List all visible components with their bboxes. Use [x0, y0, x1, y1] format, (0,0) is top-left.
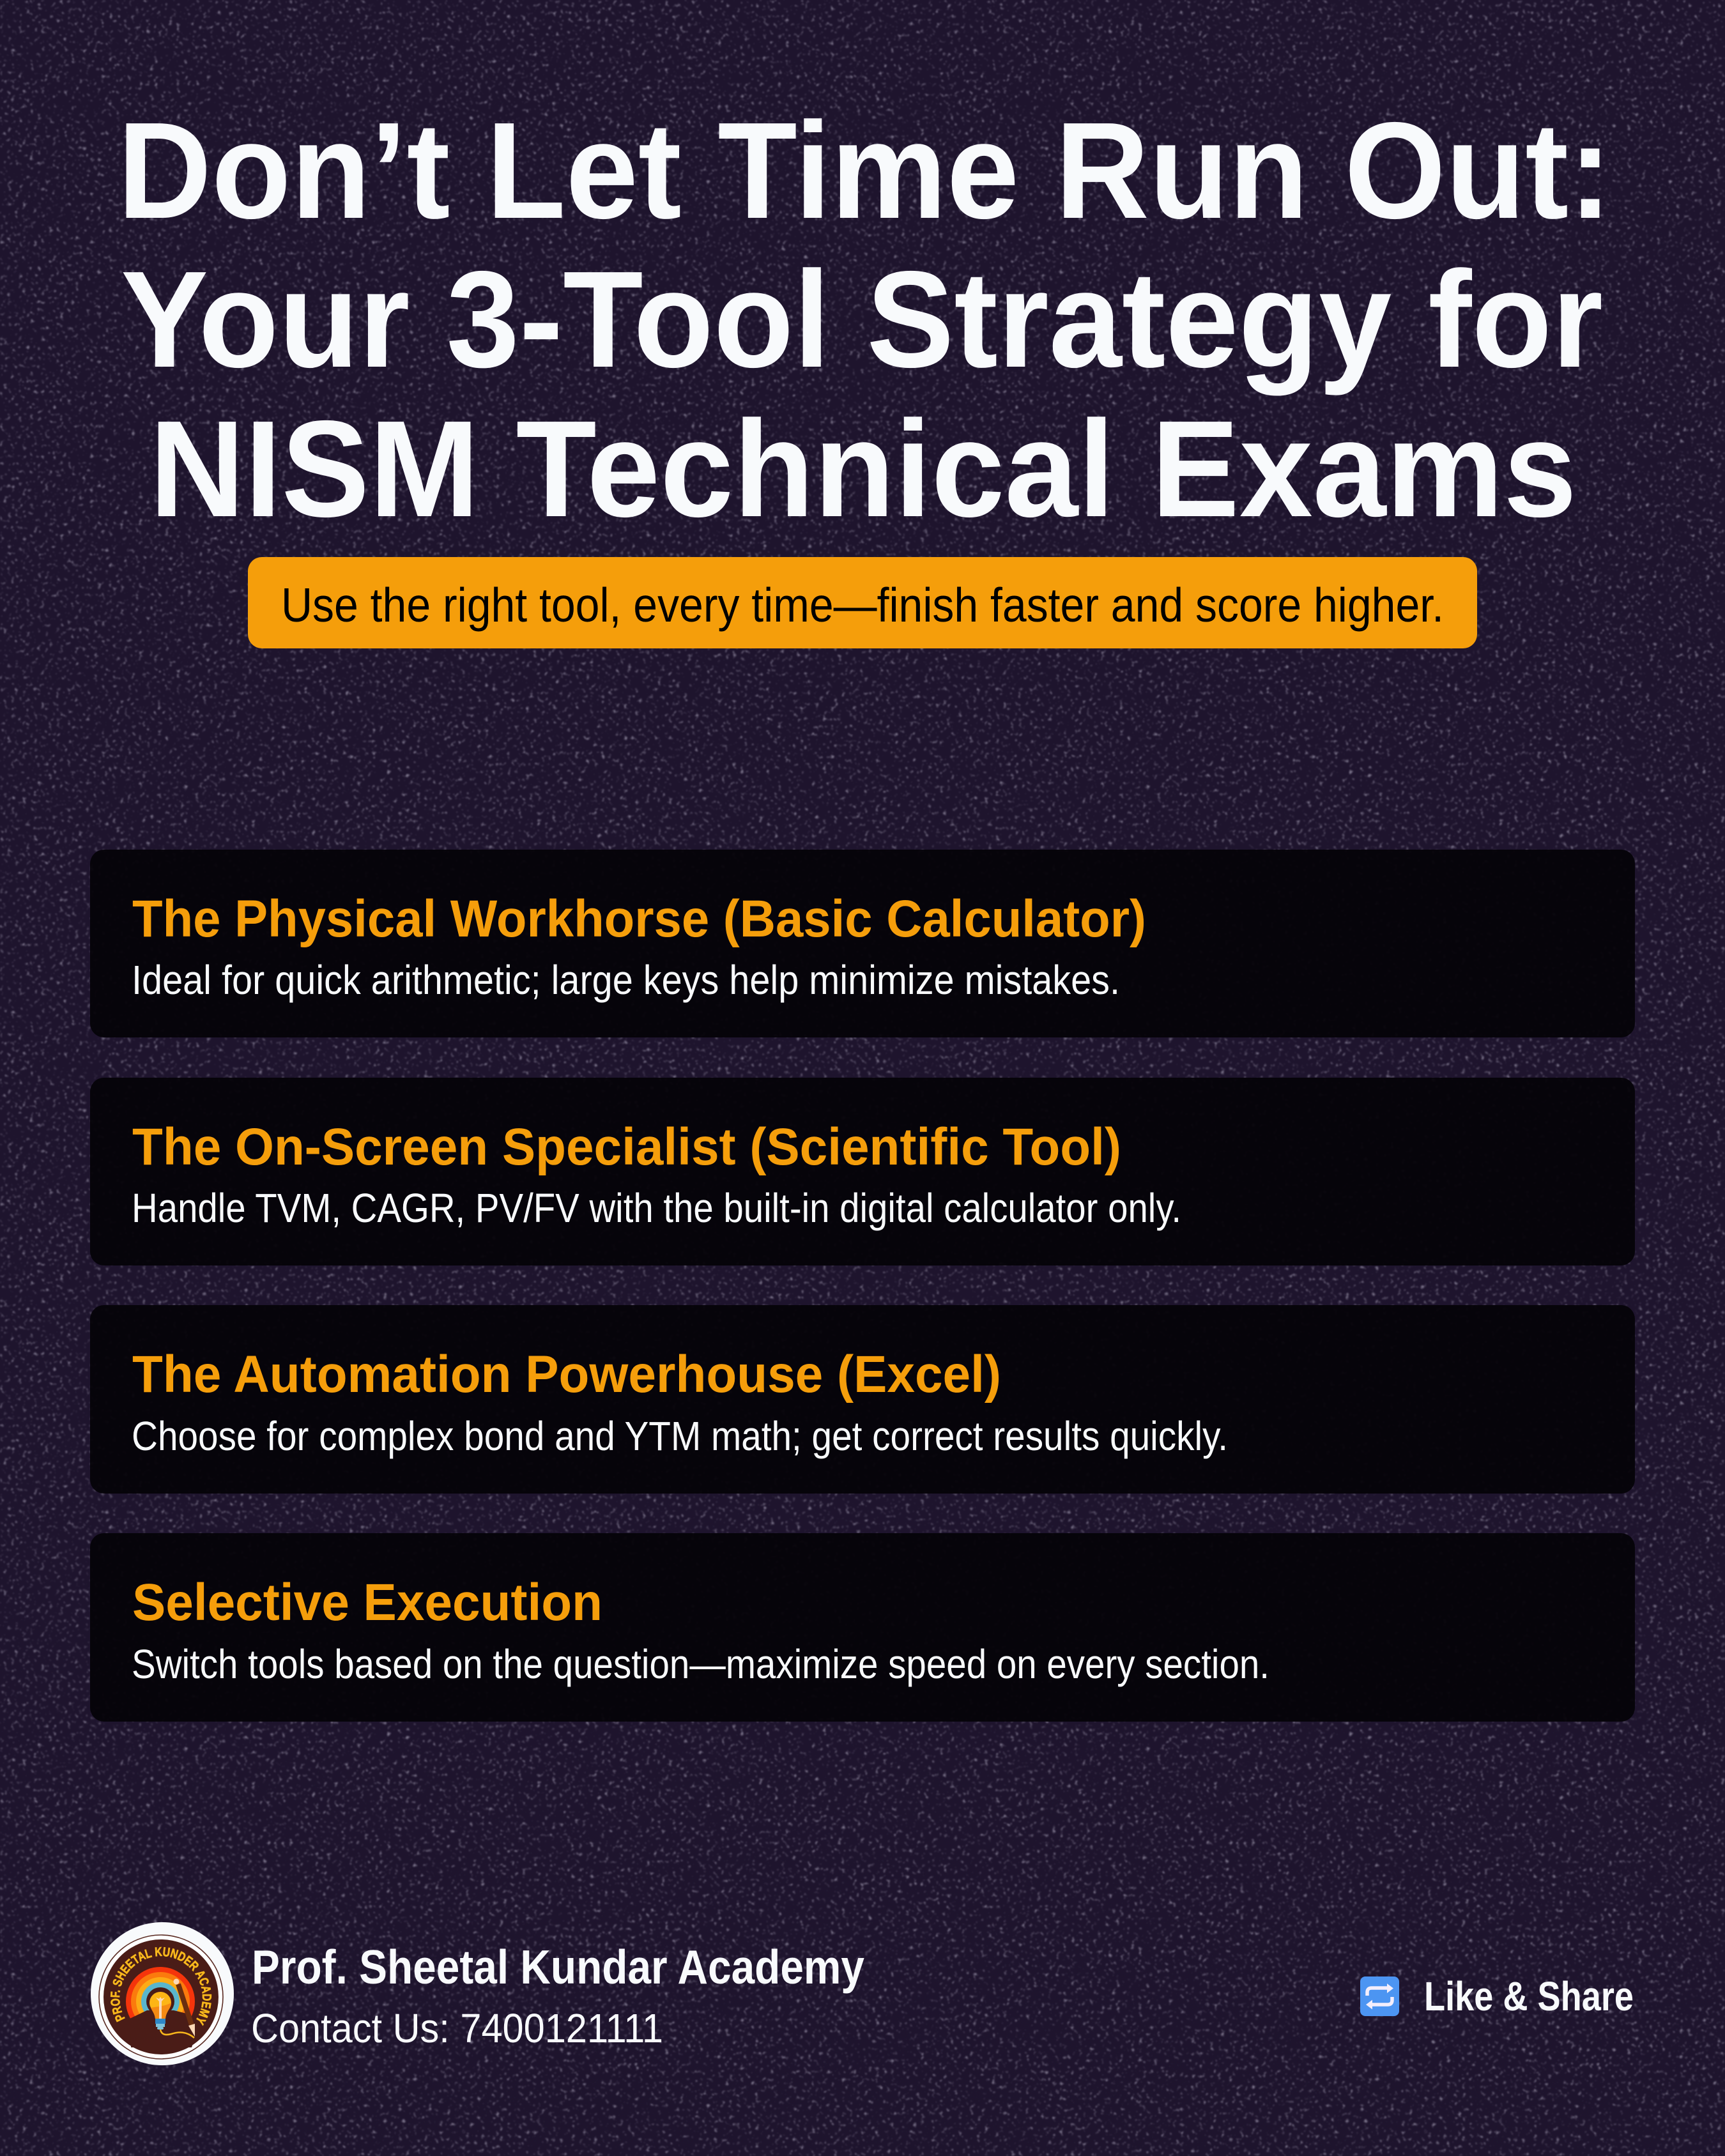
panel: selective execution: [90, 1533, 1635, 1722]
heading: physical workhorse: The Physical Workhorse (Basic Calculator): [132, 890, 1146, 948]
text: selective execution: Switch tools based on the question—maximize speed on every section.: [132, 1641, 1269, 1687]
subtitle pill: Use the right tool, every time—finish faster and score higher.: [281, 578, 1444, 632]
title: [118, 93, 1612, 546]
academy name: Prof. Sheetal Kundar Academy: [252, 1940, 864, 1994]
heading: selective execution: Selective Execution: [132, 1573, 602, 1632]
title: Don’t Let Time Run Out:: [118, 93, 1612, 247]
panel: excel: [90, 1305, 1635, 1494]
panel: basic calculator: [90, 850, 1635, 1037]
icon: academy logo: [91, 1922, 234, 2065]
title: NISM Technical Exams: [150, 392, 1577, 546]
title: Your 3-Tool Strategy for: [121, 242, 1603, 396]
text: physical workhorse: Ideal for quick arithmetic; large keys help minimize mistakes.: [132, 957, 1120, 1003]
text: automation powerhouse: Choose for complex bond and YTM math; get correct results quickly.: [132, 1413, 1228, 1459]
heading: on-screen specialist: The On-Screen Specialist (Scientific Tool): [132, 1118, 1121, 1176]
contact number: Contact Us: 7400121111: [251, 2005, 663, 2051]
subtitle pill: [248, 557, 1477, 648]
text: on-screen specialist: Handle TVM, CAGR, PV/FV with the built-in digital calculator only.: [132, 1185, 1181, 1231]
icon: academy logo: PROF. SHEETAL KUNDER ACADEMY: [110, 1947, 212, 2026]
heading: automation powerhouse: The Automation Powerhouse (Excel): [132, 1345, 1001, 1403]
panel: scientific tool: [90, 1078, 1635, 1265]
like and share: Like & Share: [1424, 1973, 1634, 2019]
icon: share repeat: [1360, 1976, 1399, 2016]
